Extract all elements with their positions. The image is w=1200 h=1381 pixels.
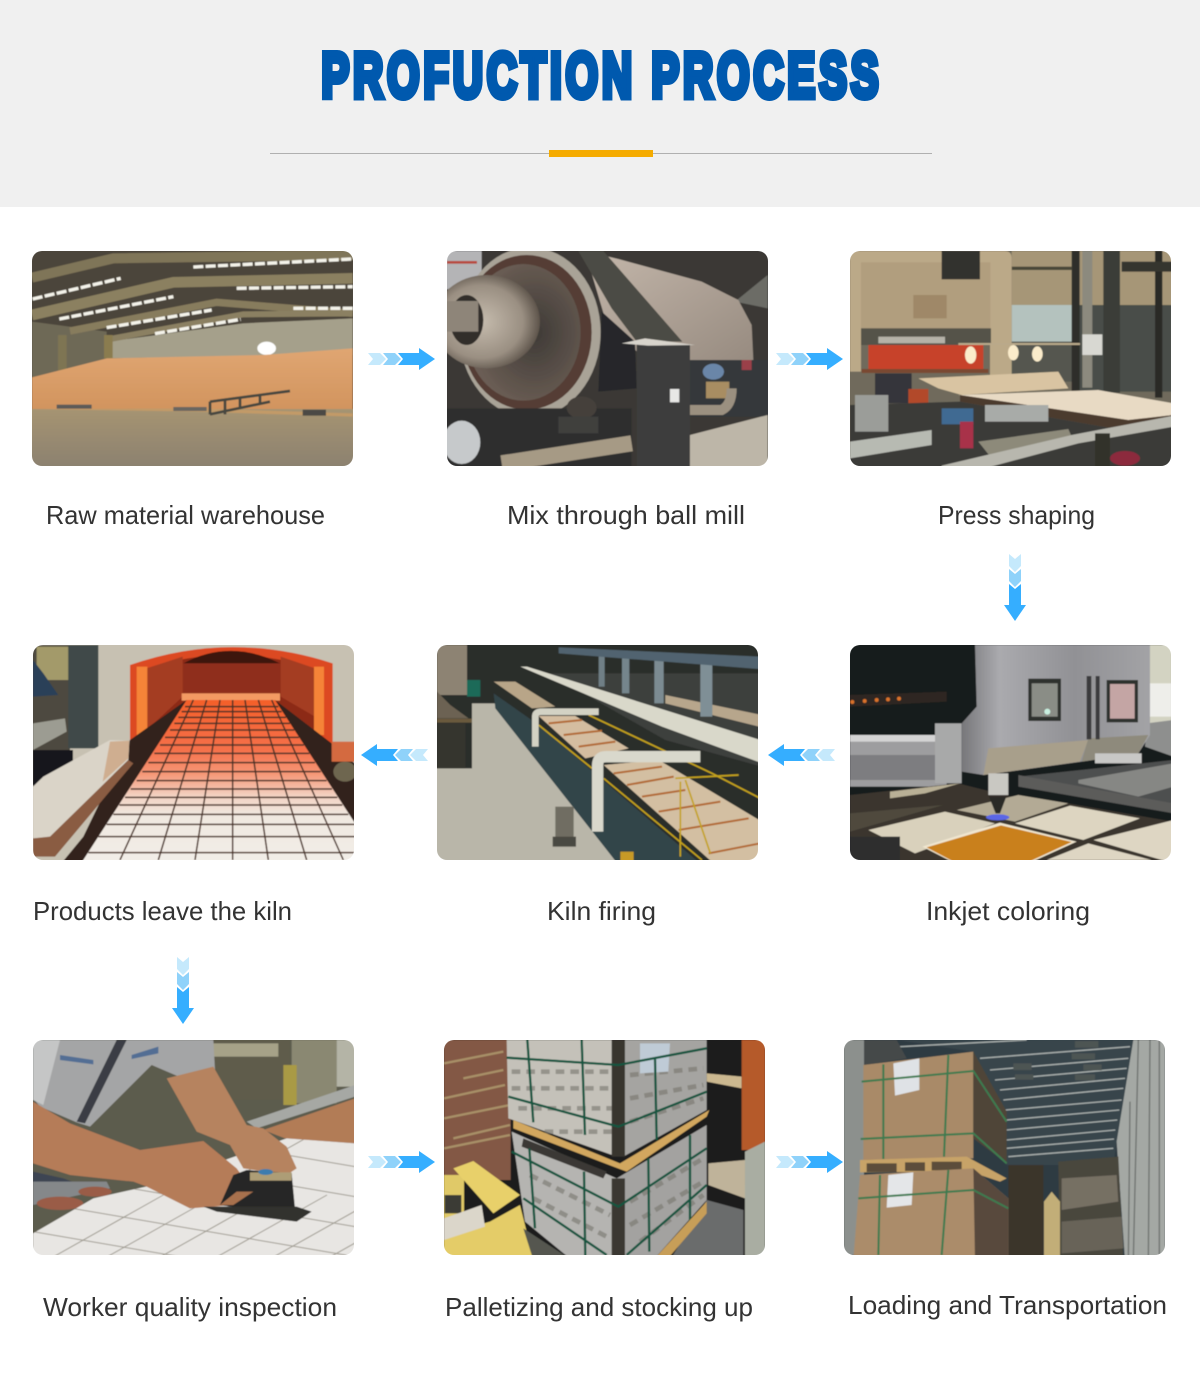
header band xyxy=(0,0,1200,207)
arrow: raw material to ball mill xyxy=(368,348,435,370)
caption: press shaping: Press shaping xyxy=(938,500,1095,530)
photo: inkjet coloring xyxy=(845,640,1175,865)
caption: worker quality inspection: Worker quality inspection xyxy=(43,1292,337,1322)
photo: worker quality inspection xyxy=(33,1040,354,1255)
caption: mix through ball mill: Mix through ball mill xyxy=(507,500,745,530)
photo: palletizing and stocking up xyxy=(440,1035,770,1260)
caption: loading and transportation: Loading and Transportation xyxy=(848,1290,1167,1320)
title: PROFUCTION PROCESS xyxy=(322,42,879,111)
photo: raw material warehouse xyxy=(30,245,360,471)
photo: ball mill xyxy=(447,251,768,466)
photo: press shaping xyxy=(845,245,1175,470)
arrow: inspection to palletizing xyxy=(368,1151,435,1173)
arrow: ball mill to press xyxy=(776,348,843,370)
photo: loading and transportation xyxy=(840,1035,1170,1260)
caption: kiln firing: Kiln firing xyxy=(547,896,656,926)
arrow: inkjet to kiln firing xyxy=(768,744,835,766)
arrow: press to inkjet xyxy=(1004,554,1026,621)
caption: inkjet coloring: Inkjet coloring xyxy=(926,896,1090,926)
photo: kiln firing xyxy=(432,640,762,865)
arrow: palletizing to loading xyxy=(776,1151,843,1173)
arrow: kiln firing to products leaving xyxy=(361,744,428,766)
caption: palletizing and stocking up: Palletizing and stocking up xyxy=(445,1292,753,1322)
photo: products leave the kiln xyxy=(30,640,360,865)
arrow: products leaving to inspection xyxy=(172,957,194,1024)
caption: raw material warehouse: Raw material warehouse xyxy=(46,500,325,530)
title divider xyxy=(270,150,932,157)
caption: products leave the kiln: Products leave the kiln xyxy=(33,896,292,926)
